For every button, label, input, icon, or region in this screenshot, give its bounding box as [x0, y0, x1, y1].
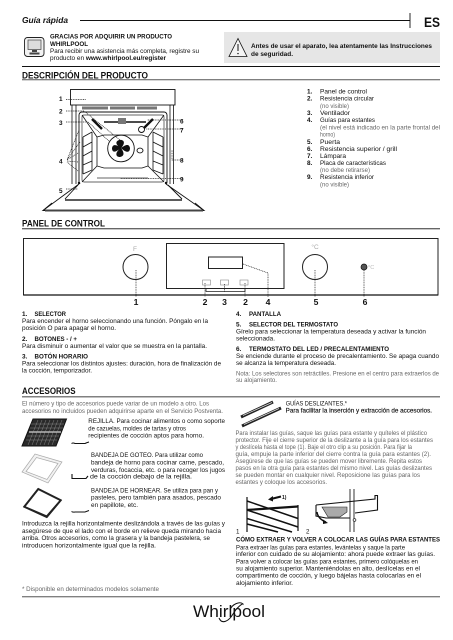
legend: parts list: Placa de características: [320, 160, 386, 167]
panel numbers: 5: [314, 297, 319, 307]
footnote: * Disponible en determinados modelos solamente: [22, 586, 160, 593]
open door: [43, 182, 204, 210]
text: controls right column: 6.: [236, 346, 242, 353]
legend: parts list: Puerta: [320, 139, 341, 146]
panel numbers: 2: [243, 297, 248, 307]
panel numbers: 1: [134, 297, 139, 307]
legend: parts list: (el nivel está indicado en la parte frontal del: [320, 124, 440, 132]
text: controls right column: SELECTOR DEL TERMOSTATO: [249, 322, 338, 328]
baking tray description: BANDEJA DE HORNEAR. Se utiliza para pan y: [91, 487, 219, 494]
warning text: Antes de usar el aparato, lea atentamente las Instrucciones: [251, 43, 433, 50]
legend: parts list: (no visible): [320, 103, 349, 110]
text: remove and refit guides: compartimento de cocción, y luego bájelas hasta colocarlas en el: [236, 573, 421, 580]
control panel strip: [70, 90, 175, 105]
warning text: [251, 43, 433, 58]
registration text: Para recibir una asistencia más completa, registre su: [50, 48, 200, 55]
header: [22, 13, 440, 30]
arrow: [317, 512, 326, 522]
diagram numbers: 2: [59, 108, 63, 116]
figure 1: rail fitting: [236, 495, 298, 536]
thermostat led: [361, 264, 374, 271]
panel numbers: 2: [203, 297, 208, 307]
icon: wire shelf: [22, 419, 66, 446]
legend: parts list: 5.: [307, 139, 313, 146]
panel numbers: 6: [363, 297, 368, 307]
figure 1: rail fitting: 1): [282, 495, 287, 501]
legend: parts list: 1.: [307, 88, 313, 95]
diagram numbers: 6: [180, 118, 184, 126]
diagram: oven front view: [43, 90, 204, 210]
shelf description: [88, 418, 226, 440]
text: controls right column: 5.: [236, 322, 242, 328]
accessory: baking tray: [23, 487, 222, 518]
text: accessories intro: accesorios no incluidos pueden adquirirse aparte en el Servicio Postventa.: [22, 408, 223, 415]
diagram numbers: 5: [59, 188, 63, 195]
registration text: WHIRLPOOL: [50, 41, 88, 48]
selector knob: F: [133, 246, 137, 253]
heading: panel de control: PANEL DE CONTROL: [22, 218, 105, 230]
diagram numbers: 4: [59, 158, 63, 166]
accessory: wire shelf: [22, 418, 226, 446]
text: guide installation: se pueden montar en cualquier nivel. Reposicione las guías para los: [236, 472, 420, 479]
sliding guides title: [286, 400, 432, 415]
accessory: sliding guides: [241, 400, 432, 426]
figure 2: rail clip: 2: [306, 528, 310, 536]
left shelf guides: [83, 132, 92, 174]
text: insertion instructions: asegúrese de que el lado con el borde en relieve queda mirando hacia: [22, 528, 222, 535]
text: remove and refit guides: [236, 536, 440, 587]
text: controls right column: [236, 311, 440, 384]
text: guide installation: [236, 430, 433, 486]
diagram numbers: 7: [180, 128, 184, 134]
legend: parts list: 7.: [307, 153, 313, 160]
text: guide installation: guía, empuje la parte inferior del cierre contra la guía para estantes (2).: [236, 451, 431, 458]
text: remove and refit guides: Para volver a colocar las guías para estantes, primero colóquelas en: [236, 558, 419, 565]
sliding guides title: GUÍAS DESLIZANTES.*: [286, 400, 348, 408]
shelf description: recipientes de cocción aptos para horno.: [88, 433, 204, 440]
text: remove and refit guides: alojamiento inferior.: [236, 580, 293, 587]
language code: ES: [424, 15, 440, 30]
accessory: drip tray: [22, 452, 225, 483]
drip tray description: verduras, focaccia, etc. o para recoger los jugos: [91, 467, 225, 474]
icon: fan: [108, 135, 134, 162]
right shelf guides: [153, 132, 163, 174]
text: guide installation: y deslícela hasta el tope (1). Baje el otro clip a su posición. Para fijar la: [236, 444, 413, 451]
registration block: [24, 34, 200, 62]
legend: parts list: horno): [320, 132, 335, 138]
text: accessories intro: El número y tipo de accesorios puede variar de un modelo a otro. Los: [22, 401, 209, 408]
icon: sliding rails: [241, 402, 281, 426]
diagram: control panel: [24, 238, 438, 307]
text: remove and refit guides: CÓMO EXTRAER Y VOLVER A COLOCAR LAS GUÍAS PARA ESTANTES: [236, 536, 440, 544]
text: controls left column: la cocción, temporizador.: [22, 368, 92, 374]
text: controls left column: [22, 311, 222, 374]
drip tray description: bandeja de horno para cocinar carne, pescado,: [91, 460, 224, 466]
diagram numbers: 3: [59, 120, 63, 127]
text: controls left column: Para disminuir o aumentar el valor que se muestra en la pantalla.: [22, 343, 207, 350]
legend: parts list: [307, 88, 440, 188]
baking tray description: pasteles, pero también para asados, pescado: [91, 495, 222, 502]
legend: parts list: (no visible): [320, 182, 349, 188]
sliding guides title: Para facilitar la inserción y extracción de accesorios.: [286, 408, 432, 415]
text: guide installation: Para instalar las guías, saque las guías para estante y quíteles el plástico: [236, 430, 428, 437]
shelf description: de cazuelas, moldes de tartas y otros: [88, 425, 186, 432]
diagram callout lines: [66, 100, 183, 189]
thermostat knob: [302, 243, 328, 280]
text: insertion instructions: Introduzca la rejilla horizontalmente deslizándola a través de las guías y: [22, 520, 226, 528]
callout: safety warning: [224, 32, 440, 63]
baking tray description: [91, 487, 222, 509]
legend: parts list: Panel de control: [320, 88, 367, 95]
text: guide installation: protector. Fije el cierre superior de la deslizante a la guía para los estantes: [236, 437, 433, 444]
text: controls left column: 1.: [22, 311, 28, 318]
text: controls right column: PANTALLA: [249, 311, 282, 318]
panel numbers: 4: [266, 297, 271, 307]
panel numbers: [134, 297, 368, 307]
text: controls right column: seleccionada.: [236, 336, 275, 342]
icon: monitor: [24, 38, 44, 56]
text: accessories intro: [22, 401, 223, 415]
legend: parts list: 4.: [307, 117, 313, 124]
text: remove and refit guides: Para extraer las guías para estantes, levántelas y saque la parte: [236, 544, 406, 551]
display panel: [166, 244, 284, 292]
text: controls left column: Para seleccionar los distintos ajustes: duración, hora de finalización de: [22, 360, 222, 368]
legend: parts list: Resistencia circular: [320, 96, 374, 103]
text: controls right column: se alcanza la temperatura deseada.: [236, 360, 336, 367]
drip tray description: BANDEJA DE GOTEO. Para utilizar como: [91, 452, 204, 459]
text: guide installation: Asegúrese de que las guías se pueden mover libremente. Repita estos: [236, 458, 422, 465]
text: controls left column: BOTÓN HORARIO: [34, 352, 88, 360]
legend: parts list: Guías para estantes: [320, 117, 375, 124]
warning text: de seguridad.: [251, 51, 293, 58]
text: controls right column: Se enciende durante el proceso de precalentamiento. Se apaga cuando: [236, 353, 440, 360]
text: controls left column: posición O para apagar el horno.: [22, 325, 116, 332]
legend: parts list: 3.: [307, 110, 313, 117]
text: guide installation: estantes y coloque los accesorios.: [236, 479, 327, 486]
legend: parts list: Resistencia superior / grill: [320, 146, 397, 153]
text: remove and refit guides: su alojamiento superior. Manteniéndolas en alto, deslícelas en el: [236, 566, 420, 573]
legend: parts list: Ventilador: [320, 110, 350, 117]
selector knob: [123, 246, 148, 280]
thermostat knob: °C: [311, 243, 319, 251]
figure 2: rail clip: [306, 489, 378, 536]
text: controls right column: Gírelo para seleccionar la temperatura deseada y activar la función: [236, 329, 427, 336]
oven cavity: [79, 112, 167, 185]
diagram numbers: 9: [180, 176, 184, 184]
heading: accesorios: ACCESORIOS: [22, 386, 76, 397]
text: controls right column: TERMOSTATO DEL LED / PRECALENTAMIENTO: [249, 346, 389, 353]
text: controls left column: SELECTOR: [34, 311, 66, 318]
arrow: [271, 496, 281, 499]
legend: parts list: (no debe retirarse): [320, 167, 370, 174]
text: insertion instructions: [22, 520, 226, 550]
figure 1: rail fitting: 1: [236, 528, 240, 536]
text: insertion instructions: introducen horizontalmente igual que la rejilla.: [22, 543, 156, 550]
title: Guía rápida: [22, 16, 68, 25]
text: insertion instructions: arriba. Otros accesorios, como la grasera y la bandeja pastelera, se: [22, 535, 211, 542]
lamp: [138, 126, 144, 132]
registration text: producto en www.whirlpool.eu/register: [50, 55, 167, 62]
text: controls left column: 3.: [22, 354, 28, 360]
text: controls right column: Nota: Los selectores son retráctiles. Presione en el centro para extraerlos de: [236, 371, 440, 378]
icon: drip tray: [22, 454, 62, 483]
shelf description: REJILLA. Para cocinar alimentos o como soporte: [88, 418, 226, 425]
registration text: [50, 34, 200, 62]
text: controls right column: 4.: [236, 311, 242, 318]
registration text: GRACIAS POR ADQUIRIR UN PRODUCTO: [50, 34, 172, 40]
thermostat led: °C: [368, 265, 374, 271]
text: controls left column: 2.: [22, 336, 28, 343]
heading: descripción del producto: DESCRIPCIÓN DEL PRODUCTO: [22, 70, 148, 82]
drip tray description: [90, 452, 225, 480]
text: controls right column: su alojamiento.: [236, 377, 277, 384]
legend: parts list: 8.: [307, 160, 313, 167]
panel callout lines: [136, 264, 364, 297]
drip tray description: de la cocción debajo de la rejilla.: [90, 474, 192, 480]
text: controls left column: BOTONES - / +: [34, 336, 77, 343]
diagram numbers: 1: [59, 96, 63, 103]
diagram numbers: 8: [180, 158, 184, 164]
legend: parts list: Lámpara: [320, 153, 347, 160]
text: remove and refit guides: inferior con cuidado de su alojamiento: ahora puede extraer las guías.: [236, 551, 435, 558]
panel numbers: 3: [222, 297, 227, 307]
text: controls left column: Para encender el horno seleccionando una función. Póngalo en la: [22, 318, 209, 325]
baking tray description: en papillote, etc.: [91, 502, 138, 509]
legend: parts list: 6.: [307, 146, 313, 153]
legend: parts list: 2.: [307, 96, 313, 103]
legend: parts list: 9.: [307, 174, 313, 181]
icon: warning triangle: [229, 38, 247, 56]
diagram numbers: [59, 96, 184, 195]
logo: whirlpool: Whirlpool: [193, 602, 265, 621]
text: guide installation: pasos en la otra guía para estantes del mismo nivel. Las guías deslizantes: [236, 465, 432, 472]
icon: baking tray: [23, 488, 62, 518]
legend: parts list: Resistencia inferior: [320, 174, 374, 181]
